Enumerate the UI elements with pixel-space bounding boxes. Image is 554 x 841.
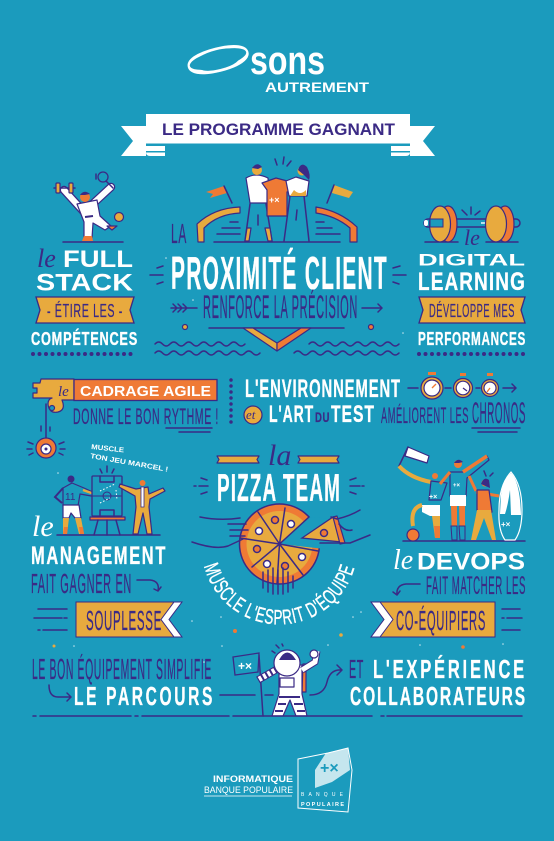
ribbon title: LE PROGRAMME GAGNANT <box>162 121 395 139</box>
panel: équipement et expérience: ET <box>349 654 364 684</box>
text: le: le <box>32 510 54 543</box>
underline <box>166 428 212 432</box>
arrow: curve <box>310 665 342 695</box>
panel: pizza team <box>191 439 371 625</box>
heading: le full stack: le <box>37 244 56 273</box>
ornament: la with ribbons <box>217 439 339 472</box>
logo: banque populaire: +× <box>320 760 339 777</box>
illustration: coach and player at tactic board: 11 <box>65 492 76 503</box>
banner: développe mes <box>419 297 525 323</box>
arrow: right <box>362 304 382 312</box>
logo: Osons autrement: O <box>179 32 257 87</box>
panel: management <box>31 444 182 637</box>
icon: hand and yoyo: le <box>58 384 69 400</box>
panel: digital learning <box>418 206 526 354</box>
icon: karate figure with dumbbell, racket and ball <box>54 172 124 242</box>
icon: stopwatches <box>408 372 516 399</box>
heading: l'art du test: DU <box>315 409 330 425</box>
arrow: down <box>137 580 161 591</box>
panel: pizza team: PIZZA TEAM <box>217 467 341 510</box>
heading: le parcours: LE PARCOURS <box>74 681 215 711</box>
banner: souplesse: SOUPLESSE <box>86 605 162 636</box>
text: améliorent les chronos <box>381 397 526 430</box>
text: le: le <box>464 225 480 250</box>
icon: barbell <box>424 206 520 242</box>
heading: l'art du test: L'ART <box>269 401 314 428</box>
heading: l'art du test: TEST <box>331 401 375 428</box>
panel: devops <box>371 447 526 637</box>
arrow: left <box>171 304 197 312</box>
speed lines <box>502 609 522 630</box>
illustration: pizza and hands <box>192 504 370 594</box>
dotted divider <box>229 380 233 424</box>
illustration: coach and player at tactic board <box>55 466 165 535</box>
heading: digital learning: DIGITAL <box>418 250 525 270</box>
logo: Osons autrement: sons <box>250 39 325 83</box>
speed lines <box>34 609 67 630</box>
illustration: astronaut with flag: +× <box>238 659 252 673</box>
heading: management: MANAGEMENT <box>31 542 167 570</box>
panel: environnement et art du test <box>244 372 526 432</box>
callout: muscle ton jeu marcel: MUSCLE <box>91 444 125 454</box>
panel: full stack <box>31 172 138 354</box>
arrow: hook <box>49 685 71 701</box>
heading: le full stack <box>36 244 134 296</box>
illustration: team with flag, ball and surfboard <box>399 447 525 541</box>
callout: muscle ton jeu marcel <box>90 444 169 474</box>
icon: et badge: et <box>246 407 256 422</box>
dotted line <box>419 352 525 356</box>
text: informatique banque populaire: BANQUE POPULAIRE <box>204 785 293 795</box>
logo: banque populaire <box>298 748 352 812</box>
text: DONNE LE BON RYTHME ! <box>73 404 219 429</box>
banner: co-équipiers <box>371 602 495 637</box>
footer: informatique banque populaire <box>204 748 352 812</box>
logo: Osons autrement: AUTREMENT <box>265 79 370 95</box>
illustration: astronaut with flag <box>220 644 318 716</box>
waves <box>155 342 399 355</box>
logo: banque populaire: POPULAIRE <box>301 802 344 808</box>
logo: Osons autrement <box>179 32 370 95</box>
ribbon title <box>121 114 435 156</box>
logo: banque populaire: BANQUE <box>301 792 344 798</box>
label: cadrage agile: CADRAGE AGILE <box>80 383 211 400</box>
underline <box>472 428 520 432</box>
panel: proximité client <box>150 157 406 355</box>
text: informatique banque populaire: INFORMATIQUE <box>213 774 293 785</box>
icon: hand and yoyo <box>27 379 74 458</box>
panel: proximité client: LA <box>171 218 187 249</box>
sparks <box>194 478 364 494</box>
sparks <box>150 266 406 284</box>
panel: cadrage agile <box>27 379 219 458</box>
curved text: muscle l'esprit d'équipe: MUSCLE L'ESPRIT D'ÉQUIPE <box>204 562 354 625</box>
banner: souplesse <box>76 602 182 637</box>
illustration: team with flag, ball and surfboard: +× <box>429 494 437 501</box>
ground line <box>33 715 522 717</box>
heading: le full stack: STACK <box>36 270 134 296</box>
icon: et badge <box>244 406 262 424</box>
banner: étire les <box>36 297 134 323</box>
arrow: down <box>393 584 420 595</box>
decorative speckles <box>57 257 504 663</box>
emblem: chevron shield <box>182 324 374 351</box>
heading: digital learning <box>418 250 526 296</box>
illustration: two figures holding a shirt, with arches and flags <box>197 157 357 242</box>
text: le: le <box>393 545 413 576</box>
panel: équipement et expérience <box>32 644 527 716</box>
illustration: two figures holding a shirt, with arches and flags: +× <box>269 195 280 205</box>
heading: le full stack: FULL <box>63 246 133 273</box>
ornament: la with ribbons: la <box>268 439 291 472</box>
dotted line <box>33 352 137 356</box>
illustration: team with flag, ball and surfboard: +× <box>453 483 461 489</box>
heading: l'environnement: L'ENVIRONNEMENT <box>245 375 401 403</box>
text: compétences: COMPÉTENCES <box>31 328 138 349</box>
panel: équipement et expérience: LE BON ÉQUIPEMENT SIMPLIFIE <box>32 653 212 686</box>
illustration: team with flag, ball and surfboard: +× <box>501 520 511 529</box>
panel: management: FAIT GAGNER EN <box>31 568 132 599</box>
text: informatique banque populaire <box>204 774 293 796</box>
heading: devops: DEVOPS <box>417 548 525 576</box>
callout: muscle ton jeu marcel: TON JEU MARCEL ! <box>90 453 169 474</box>
banner: étire les: - ÉTIRE LES - <box>47 301 123 321</box>
